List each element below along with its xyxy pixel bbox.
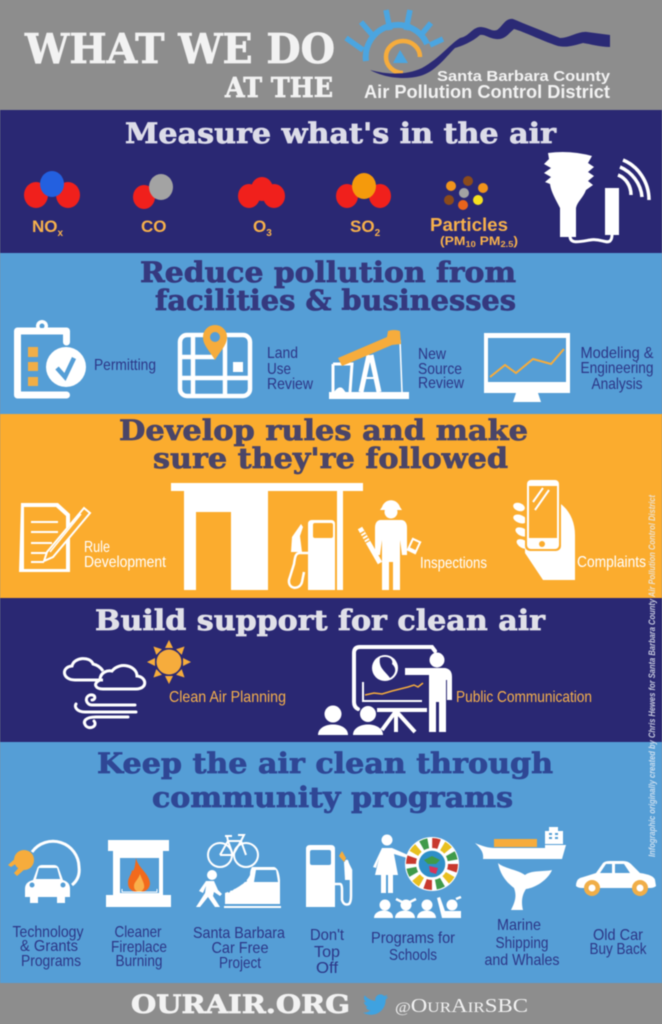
panel: header <box>0 0 662 110</box>
panel: support <box>0 598 662 742</box>
label: SO2: SO <box>350 217 375 236</box>
label: NOx: NO <box>32 217 58 236</box>
label: modeling: Analysis <box>592 376 642 393</box>
icon: O3 molecule <box>238 177 285 208</box>
label: O3: O <box>253 217 266 236</box>
icon: particles <box>444 176 488 210</box>
icon: monitor with chart <box>484 333 570 402</box>
label: land use review: Review <box>267 376 313 393</box>
label: PM sizes: PM <box>476 234 500 248</box>
label: don't top off: Top <box>314 944 340 961</box>
heading: reduce line 2: facilities & businesses <box>155 284 516 317</box>
icon: air monitor <box>544 152 649 242</box>
label: inspections: Inspections <box>420 555 487 572</box>
label: PM sizes: ) <box>513 234 518 248</box>
icon: NOx molecule <box>24 171 80 208</box>
label: technology grants <box>12 924 84 970</box>
credit line: Infographic originally created by Chris Hewes for Santa Barbara County Air Pollution Control District <box>647 494 657 857</box>
label: old car buy back: Old Car <box>593 927 644 944</box>
heading: rules line 1: Develop rules and make <box>119 414 528 447</box>
heading: support: Build support for clean air <box>95 604 546 637</box>
icon: students <box>374 897 461 918</box>
icon: bicycle <box>208 835 258 867</box>
icon: land use map <box>178 325 252 396</box>
label: land use review <box>267 345 313 393</box>
panel: community <box>0 742 662 983</box>
heading: measure: Measure what's in the air <box>125 117 557 150</box>
label: new source review: New <box>418 346 446 363</box>
label: new source review: Source <box>418 361 462 378</box>
label: land use review: Land <box>267 345 298 362</box>
icon: globe wheel <box>405 837 459 891</box>
icon: presentation board <box>354 647 435 732</box>
label: old car buy back: Buy Back <box>590 941 647 958</box>
label: marine shipping <box>484 917 560 969</box>
label: rule development: Development <box>84 554 166 571</box>
label: PM sizes: 2.5 <box>500 240 514 249</box>
icon: rule document <box>19 503 90 572</box>
panel: reduce <box>0 253 662 414</box>
website url: OURAIR.ORG <box>131 990 350 1019</box>
title: at the: AT THE <box>224 73 333 104</box>
label: O3: 3 <box>266 228 272 239</box>
label: public communication: Public Communication <box>456 689 592 706</box>
label: PM sizes: 10 <box>465 240 476 249</box>
label: particles: Particles <box>430 215 508 235</box>
icon: old car <box>576 861 656 896</box>
label: modeling: Modeling & <box>580 345 654 362</box>
label: technology grants: Technology <box>12 924 84 941</box>
label: complaints: Complaints <box>577 554 646 571</box>
icon: twitter bird <box>363 994 388 1015</box>
label: don't top off: Don't <box>310 927 345 944</box>
label: modeling <box>580 345 654 393</box>
label: car free: Santa Barbara <box>193 925 285 942</box>
icon: gas pump <box>306 845 351 907</box>
icon: EV car and plug <box>8 841 79 903</box>
title: what we do: WHAT WE DO <box>24 25 335 73</box>
label: don't top off: Off <box>316 960 339 977</box>
label: cleaner fireplace: Fireplace <box>111 939 167 956</box>
label: programs for schools: Schools <box>389 947 437 964</box>
icon: phone in hand <box>512 478 575 580</box>
icon: fireplace <box>106 840 171 907</box>
icon: whale tail <box>498 863 552 910</box>
icon: fuel pump <box>289 520 335 590</box>
label: new source review: Review <box>418 375 464 392</box>
icon: train <box>224 867 281 907</box>
heading: community line 2: community programs <box>152 781 513 814</box>
icon: walker <box>196 870 222 907</box>
heading: community line 1: Keep the air clean through <box>97 747 553 780</box>
panel: footer <box>0 983 662 1024</box>
icon: teacher <box>373 834 408 893</box>
icon: sun <box>147 640 191 684</box>
icon: SO2 molecule <box>336 173 391 208</box>
label: CO: CO <box>141 217 166 236</box>
twitter handle: @OURAIRSBC <box>395 995 528 1017</box>
label: cleaner fireplace: Burning <box>116 953 162 970</box>
label: car free <box>193 925 285 972</box>
label: marine shipping: Shipping <box>496 935 548 952</box>
label: programs for schools <box>371 930 456 964</box>
label: rule development: Rule <box>84 539 110 556</box>
label: car free: Project <box>219 955 261 972</box>
label: SO2: 2 <box>375 228 381 239</box>
label: clean air planning: Clean Air Planning <box>169 689 286 706</box>
label: cleaner fireplace: Cleaner <box>114 924 162 941</box>
label: car free: Car Free <box>212 940 269 957</box>
icon: CO molecule <box>133 174 173 209</box>
icon: facility canopy <box>171 483 363 590</box>
label: technology grants: Programs <box>21 953 81 970</box>
icon: permit clipboard <box>18 320 86 395</box>
label: permitting: Permitting <box>94 357 156 374</box>
icon: clouds <box>64 659 145 689</box>
heading: reduce line 1: Reduce pollution from <box>140 256 516 289</box>
label: new source review <box>418 346 464 392</box>
label: technology grants: & Grants <box>20 938 78 955</box>
logo: sun and mountain <box>346 10 610 78</box>
label: cleaner fireplace <box>111 924 167 970</box>
icon: inspector <box>360 500 421 590</box>
icon: audience <box>318 706 383 735</box>
icon: wind <box>75 695 136 728</box>
label: marine shipping: and Whales <box>484 952 560 969</box>
label: rule development <box>84 539 166 571</box>
icon: presenter <box>405 652 452 732</box>
logo text: district: Air Pollution Control District <box>364 82 610 102</box>
label: land use review: Use <box>267 361 291 378</box>
label: NOx: x <box>58 228 64 239</box>
panel: rules <box>0 414 662 598</box>
label: programs for schools: Programs for <box>371 930 456 947</box>
label: don't top off <box>310 927 345 977</box>
label: PM sizes: (PM <box>440 234 462 248</box>
label: marine shipping: Marine <box>497 917 541 934</box>
heading: rules line 2: sure they're followed <box>153 442 508 475</box>
logo text: county: Santa Barbara County <box>437 68 611 85</box>
label: old car buy back <box>590 927 647 958</box>
icon: ship <box>475 827 566 859</box>
panel: measure <box>0 110 662 253</box>
icon: oil pump <box>329 330 409 399</box>
